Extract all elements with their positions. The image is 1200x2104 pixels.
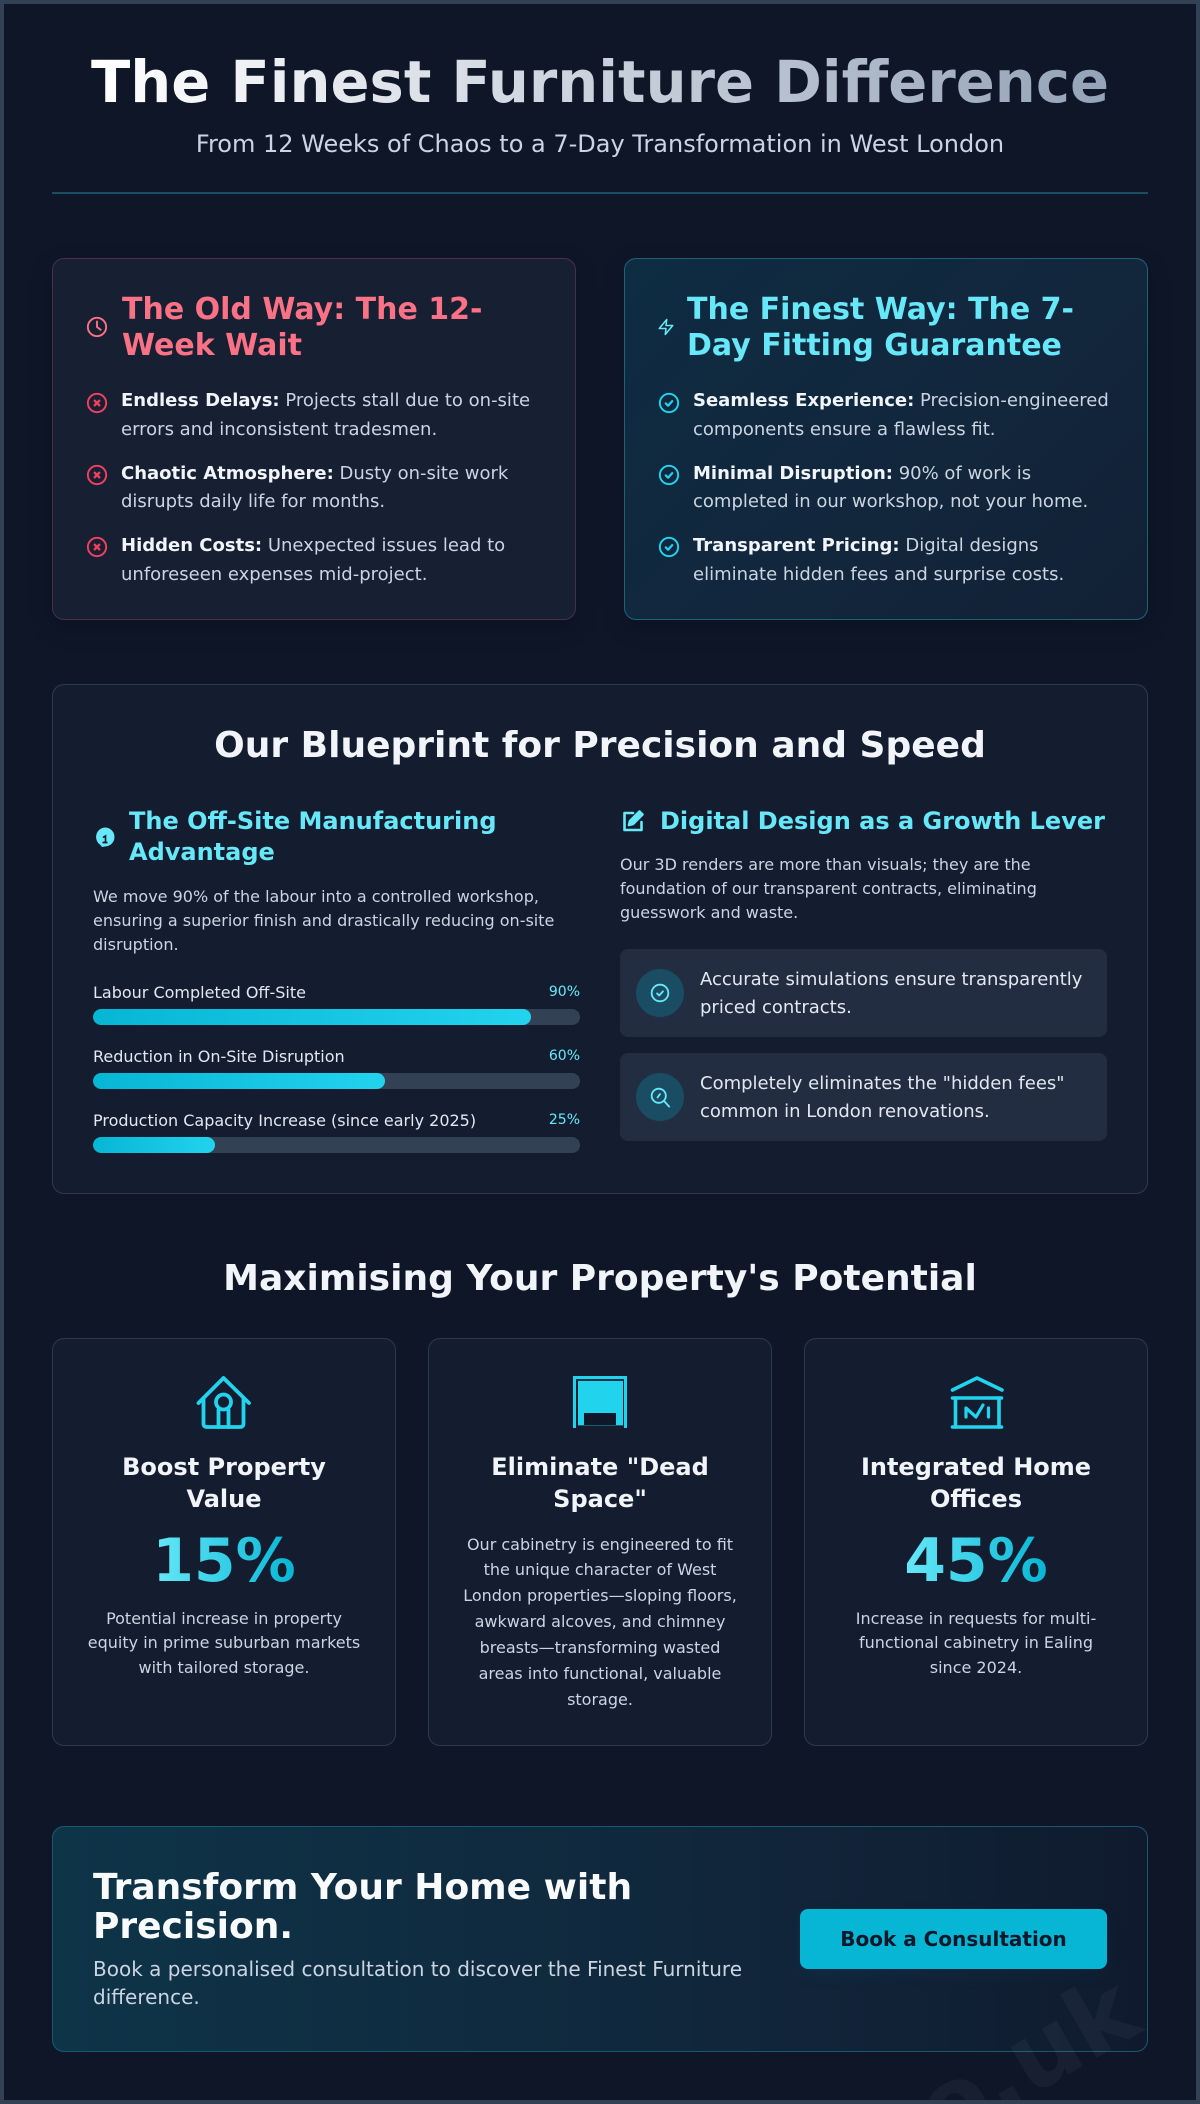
callout: hidden fees: [620, 1053, 1107, 1141]
text: off-site paragraph: [93, 887, 554, 954]
heading: dead space: [491, 1453, 709, 1513]
bar: labour completed: [93, 983, 580, 1025]
text: endless delays: Endless Delays: Projects stall due to on-site: [121, 390, 530, 411]
label: Labour Completed Off-Site: [93, 983, 306, 1002]
text: home offices description: [856, 1609, 1096, 1677]
icon: check bullet 1: [658, 392, 680, 414]
text: off-site paragraph: ensuring a superior finish and drastically reducing on-site: [93, 911, 554, 930]
panel: the finest way: [624, 258, 1148, 620]
column: off-site manufacturing: [93, 807, 580, 1153]
heading: cta: Precision.: [93, 1906, 293, 1947]
text: home offices description: Increase in requests for multi-: [856, 1609, 1096, 1628]
heading: boost: Boost Property: [122, 1453, 326, 1481]
value: 15%: 15%: [152, 1526, 296, 1596]
text: cta description: [93, 1955, 742, 2012]
text: cta description: Book a personalised consultation to discover the Finest Furniture: [93, 1957, 742, 1981]
track: [93, 1137, 580, 1153]
heading: digital design: Digital Design as a Growth Lever: [660, 807, 1105, 835]
icon: badge check: [636, 969, 684, 1017]
text: off-site paragraph: We move 90% of the labour into a controlled workshop,: [93, 887, 539, 906]
heading: boost: [122, 1453, 326, 1513]
text: boost description: equity in prime suburban markets: [88, 1633, 360, 1652]
heading: finest way: The Finest Way: The 7-: [687, 292, 1074, 326]
icon: check bullet 2: [658, 464, 680, 486]
text: home offices description: since 2024.: [930, 1658, 1022, 1677]
text: fees: Completely eliminates the "hidden fees": [700, 1073, 1065, 1094]
icon: home office: [950, 1376, 1004, 1429]
panel: integrated home offices: [804, 1338, 1148, 1746]
text: transparent pricing: eliminate hidden fees and surprise costs.: [693, 564, 1064, 584]
text: chaotic atmosphere: disrupts daily life for months.: [121, 491, 385, 512]
heading: boost: Value: [186, 1485, 262, 1513]
text: transparent pricing: [693, 535, 1064, 584]
text: hidden costs: [121, 535, 505, 584]
text: digital paragraph: foundation of our transparent contracts, eliminating: [620, 879, 1037, 898]
icon: x bullet 3: [86, 536, 108, 558]
text: dead space description: areas into functional, valuable: [479, 1664, 721, 1683]
text: cta description: difference.: [93, 1985, 200, 2009]
heading: home offices: [861, 1453, 1091, 1513]
icon: house: [196, 1376, 251, 1429]
text: home offices description: functional cabinetry in Ealing: [859, 1633, 1093, 1652]
value: 45%: 45%: [904, 1526, 1048, 1596]
label: Reduction in On-Site Disruption: [93, 1047, 345, 1066]
text: seamless experience: components ensure a flawless fit.: [693, 418, 996, 440]
heading: home offices: Offices: [930, 1485, 1022, 1513]
heading: off-site: The Off-Site Manufacturing: [129, 807, 497, 835]
button: book a consultation: Book a Consultation: [840, 1927, 1067, 1951]
button: book a consultation: [800, 1909, 1107, 1969]
text: boost description: with tailored storage.: [139, 1658, 309, 1677]
text: minimal disruption: completed in our workshop, not your home.: [693, 491, 1088, 512]
heading: maximising potential: Maximising Your Property's Potential: [223, 1258, 977, 1299]
text: off-site paragraph: disruption.: [93, 935, 179, 954]
panel: the old way: [52, 258, 576, 620]
heading: home offices: Integrated Home: [861, 1453, 1091, 1481]
icon: check bullet 3: [658, 536, 680, 558]
bar: on-site disruption: [93, 1047, 580, 1089]
text: endless delays: errors and inconsistent tradesmen.: [121, 418, 437, 440]
heading: off-site: [129, 807, 497, 866]
text: minimal disruption: Minimal Disruption: 90% of work is: [693, 463, 1031, 484]
text: minimal disruption: [693, 463, 1088, 512]
text: boost description: Potential increase in property: [106, 1609, 342, 1628]
text: chaotic atmosphere: [121, 463, 508, 512]
heading: finest way: [687, 292, 1074, 362]
text: fees: common in London renovations.: [700, 1101, 990, 1122]
heading: old way: The Old Way: The 12-: [122, 292, 482, 326]
panel: blueprint: [52, 684, 1148, 1194]
text: endless delays: [121, 390, 530, 440]
icon: x bullet 2: [86, 464, 108, 486]
text: digital paragraph: guesswork and waste.: [620, 903, 798, 922]
value: 25%: [549, 1112, 580, 1128]
text: chaotic atmosphere: Chaotic Atmosphere: Dusty on-site work: [121, 463, 508, 484]
icon: magnifier: [636, 1073, 684, 1121]
text: digital paragraph: Our 3D renders are more than visuals; they are the: [620, 855, 1031, 874]
value: 60%: [549, 1048, 580, 1064]
text: dead space description: storage.: [567, 1690, 633, 1709]
value: 90%: [549, 984, 580, 1000]
track: [93, 1073, 580, 1089]
text: simulations: priced contracts.: [700, 997, 852, 1018]
heading: finest way: Day Fitting Guarantee: [687, 328, 1062, 362]
bar: production capacity: [93, 1111, 580, 1153]
subtitle: From 12 Weeks of Chaos to a 7-Day Transformation in West London: [196, 130, 1004, 158]
title: The Finest Furniture Difference: [91, 49, 1109, 116]
text: hidden costs: Hidden Costs: Unexpected issues lead to: [121, 535, 505, 556]
heading: blueprint: Our Blueprint for Precision and Speed: [214, 724, 986, 766]
heading: off-site: Advantage: [129, 838, 275, 866]
text: dead space description: Our cabinetry is engineered to fit: [467, 1534, 733, 1554]
text: dead space description: London properties—sloping floors,: [463, 1586, 737, 1605]
heading: cta: Transform Your Home with: [93, 1866, 632, 1908]
icon: clock: [86, 316, 108, 338]
text: simulations: Accurate simulations ensure transparently: [700, 969, 1082, 990]
icon: pencil square: [623, 810, 644, 832]
text: transparent pricing: Transparent Pricing: Digital designs: [693, 535, 1039, 556]
icon: bolt: [658, 318, 674, 336]
text: simulations: [700, 969, 1082, 1018]
text: digital paragraph: [620, 855, 1037, 922]
panel: eliminate dead space: [428, 1338, 772, 1746]
heading: dead space: Space": [553, 1485, 647, 1513]
icon: off-site badge: [96, 828, 114, 847]
panel: boost property value: [52, 1338, 396, 1746]
track: [93, 1009, 580, 1025]
heading: cta: [93, 1866, 632, 1947]
column: digital design: [620, 807, 1107, 1141]
text: dead space description: the unique character of West: [484, 1560, 716, 1579]
heading: old way: Week Wait: [122, 328, 302, 362]
text: fees: [700, 1073, 1065, 1122]
text: dead space description: breasts—transforming wasted: [480, 1638, 720, 1657]
text: dead space description: awkward alcoves, and chimney: [475, 1612, 725, 1631]
heading: old way: [122, 292, 482, 362]
text: hidden costs: unforeseen expenses mid-project.: [121, 564, 427, 584]
callout: accurate simulations: [620, 949, 1107, 1037]
text: dead space description: [463, 1534, 737, 1709]
icon: cabinet: [573, 1376, 627, 1428]
panel: call to action: [52, 1826, 1148, 2052]
text: boost description: [88, 1609, 360, 1677]
icon: x bullet 1: [86, 392, 108, 414]
label: Production Capacity Increase (since early 2025): [93, 1111, 476, 1130]
heading: dead space: Eliminate "Dead: [491, 1453, 709, 1481]
text: seamless experience: [693, 390, 1109, 440]
text: seamless experience: Seamless Experience: Precision-engineered: [693, 390, 1109, 411]
